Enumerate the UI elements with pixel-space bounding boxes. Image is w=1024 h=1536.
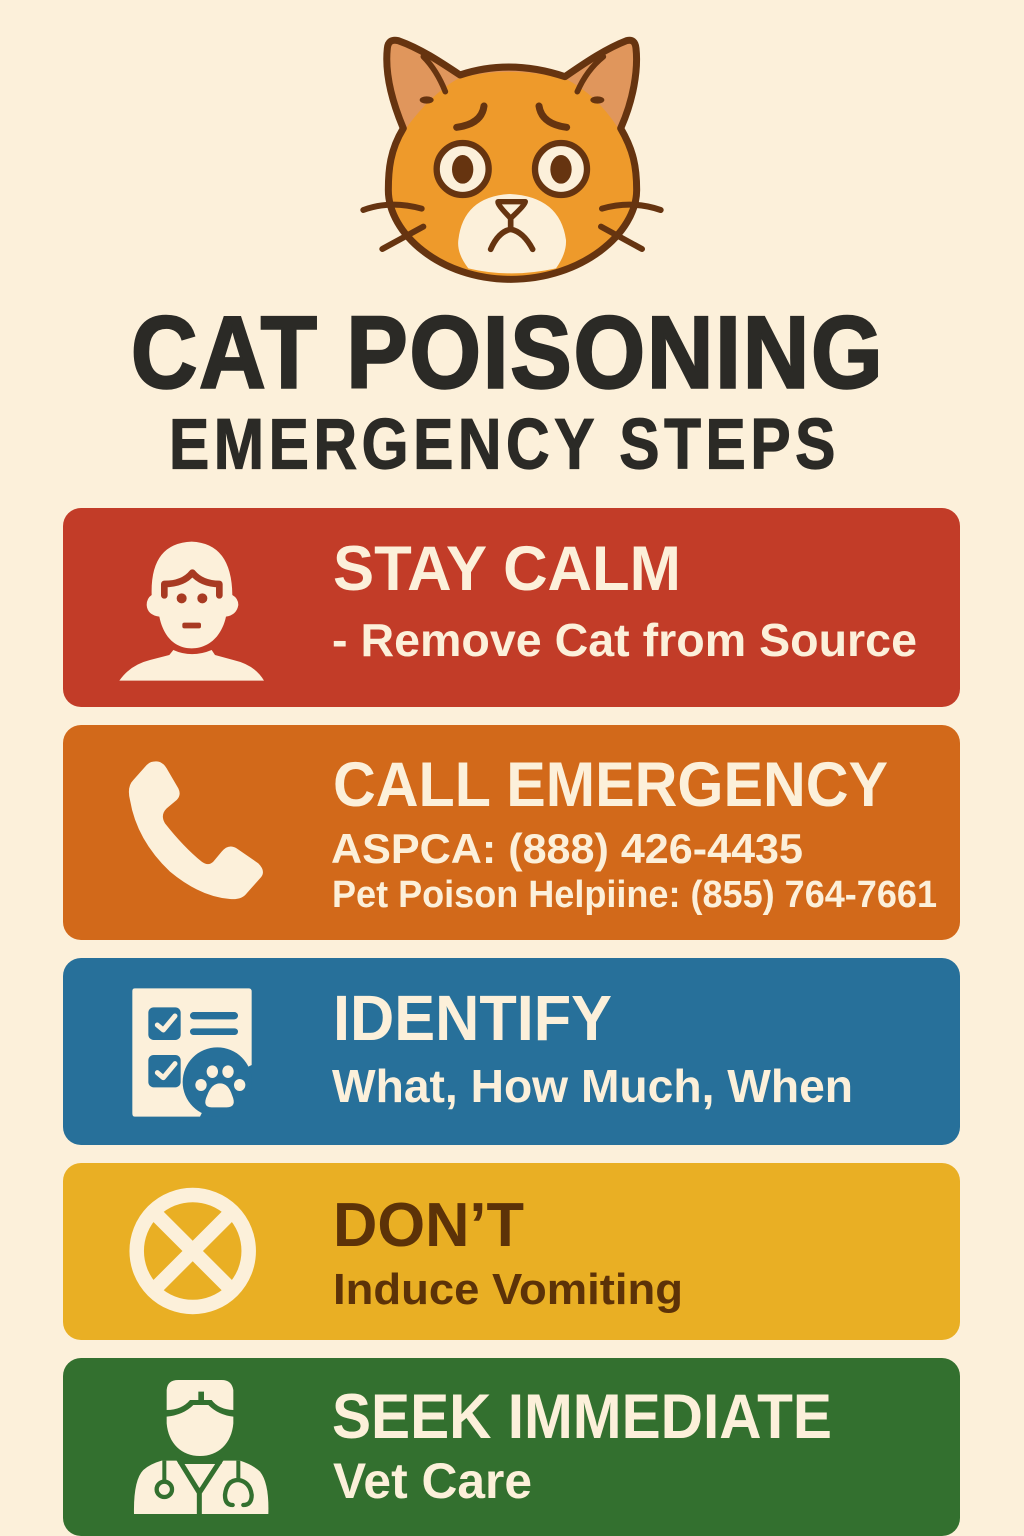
text: induce vomiting: Induce Vomiting <box>333 1265 683 1314</box>
icon: checklist with paw <box>132 988 252 1117</box>
heading: stay calm: STAY CALM <box>333 534 681 604</box>
subtitle: EMERGENCY STEPS <box>169 404 835 484</box>
panel: identify <box>63 958 960 1145</box>
icon: worried orange cat <box>363 40 661 279</box>
heading: identify: IDENTIFY <box>333 982 612 1054</box>
text: aspca number: ASPCA: (888) 426-4435 <box>331 825 803 872</box>
heading: seek immediate: SEEK IMMEDIATE <box>332 1382 832 1452</box>
heading: don't: DON’T <box>333 1191 524 1260</box>
title: CAT POISONING <box>131 295 883 410</box>
text: vet care: Vet Care <box>333 1453 532 1509</box>
text: what, how much, when: What, How Much, When <box>332 1060 853 1112</box>
icon: veterinarian <box>134 1380 268 1515</box>
text: pet poison helpline number: Pet Poison Helpiine: (855) 764-7661 <box>332 874 937 916</box>
text: remove cat from source: - Remove Cat from Source <box>332 614 917 666</box>
icon: worried person <box>119 542 264 681</box>
panel: don't <box>63 1163 960 1340</box>
icon: prohibited cross <box>137 1195 249 1307</box>
heading: call emergency: CALL EMERGENCY <box>333 750 888 820</box>
panel: call emergency <box>63 725 960 940</box>
icon: phone <box>129 761 263 899</box>
panel: seek immediate <box>63 1358 960 1536</box>
panel: stay calm <box>63 508 960 707</box>
